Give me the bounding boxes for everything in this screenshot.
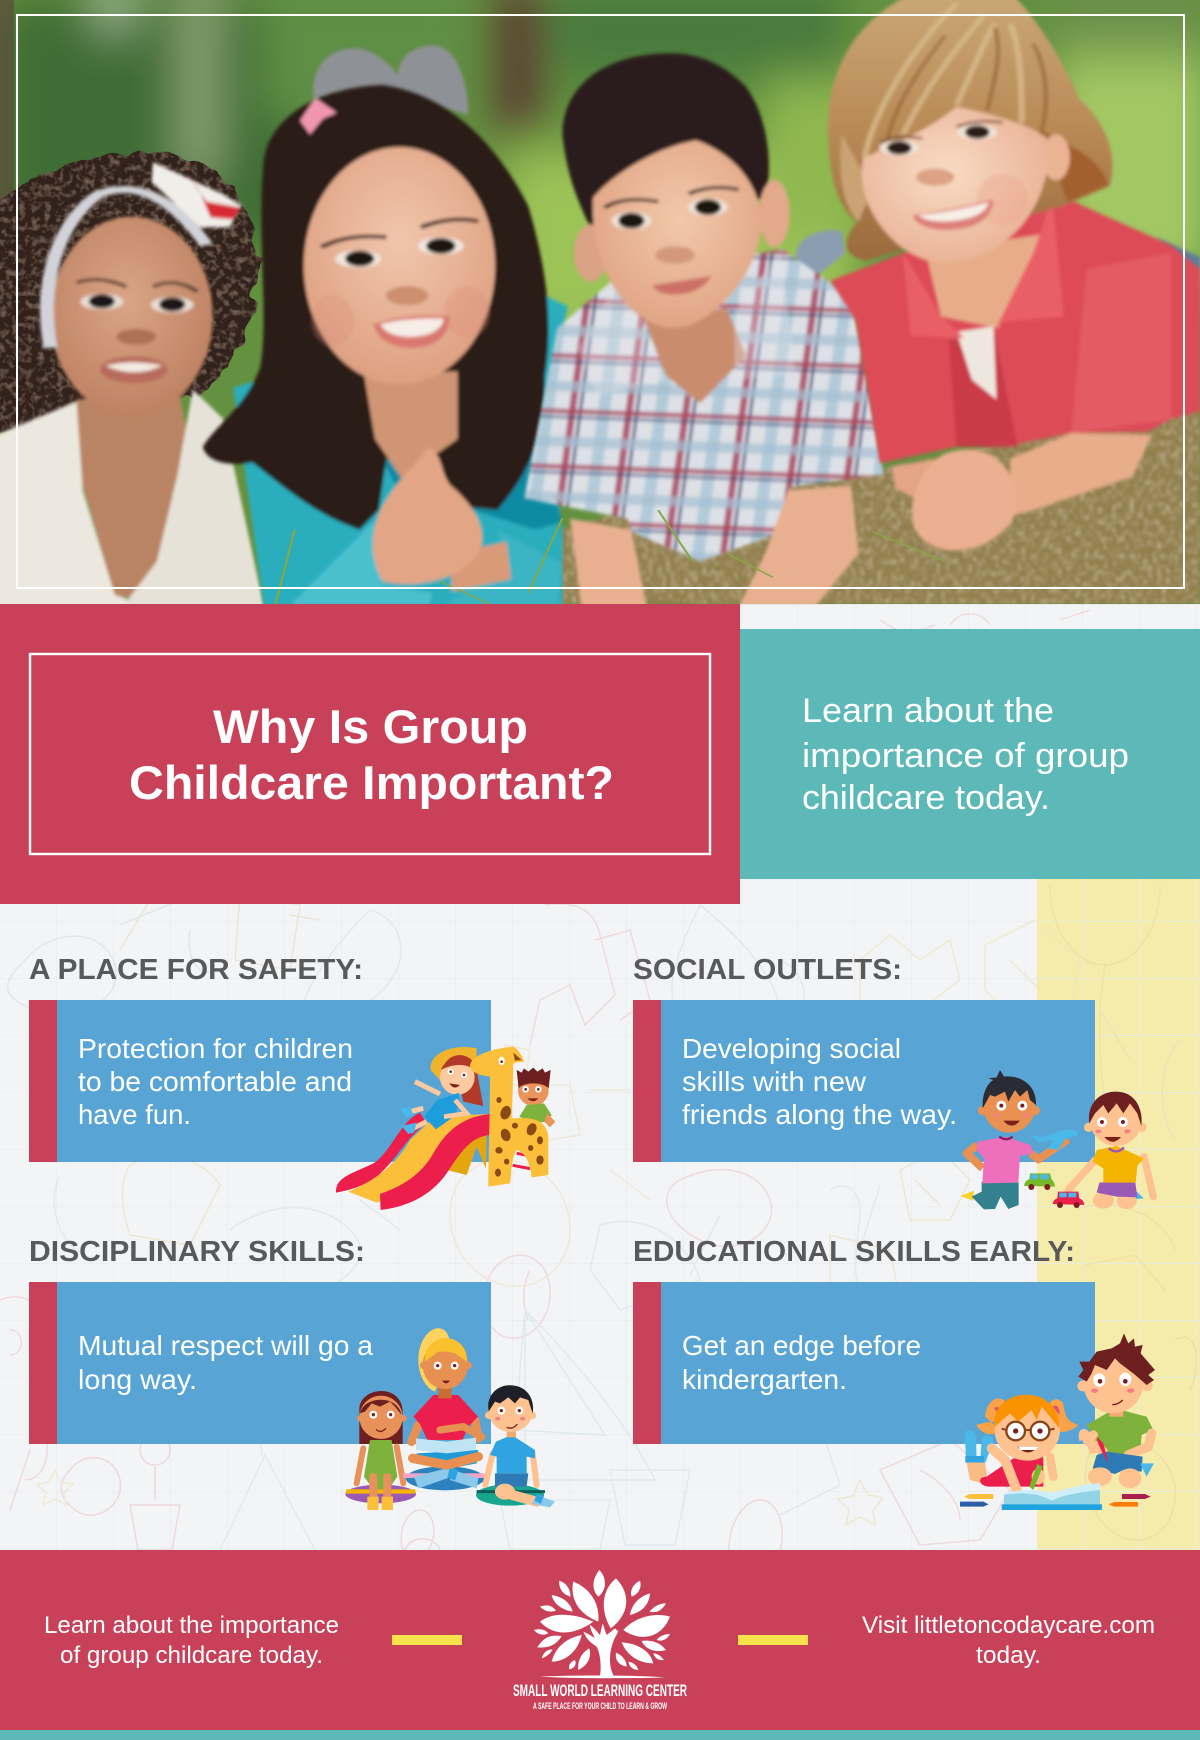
yellow dash right: [738, 1635, 808, 1645]
child 3: boy in plaid shirt: [524, 53, 884, 607]
card: disciplinary: Mutual respect will go a: [78, 1330, 373, 1361]
heading: educational skills early: EDUCATIONAL SKILLS EARLY:: [633, 1236, 1075, 1268]
card: social: skills with new: [682, 1066, 867, 1097]
card: disciplinary: [29, 1282, 491, 1444]
footer band: [0, 1550, 1200, 1730]
child 2: girl with long dark hair: [203, 85, 568, 607]
grass: [559, 407, 1200, 604]
footer left text: Learn about the importance: [44, 1612, 339, 1639]
child 1: girl with curly hair: [0, 152, 264, 607]
jeans behind blond boy: [796, 230, 1200, 281]
card: social: Developing social: [682, 1033, 901, 1064]
card: safety: have fun.: [78, 1099, 191, 1130]
logo name: SMALL WORLD LEARNING CENTER: [513, 1681, 687, 1700]
notebook grid: [0, 604, 1200, 1550]
heading: disciplinary skills: DISCIPLINARY SKILLS:: [29, 1236, 365, 1268]
illustration: children drawing with a book: [960, 1333, 1155, 1510]
card: safety: [29, 1000, 491, 1162]
photo white frame: [17, 15, 1184, 588]
logo tagline: A SAFE PLACE FOR YOUR CHILD TO LEARN & GROW: [533, 1701, 667, 1711]
grey shoes behind girl: [313, 45, 468, 115]
card: educational: kindergarten.: [682, 1364, 847, 1395]
blurred green park background: [0, 0, 1200, 604]
illustration: boys playing with toys: [960, 1070, 1153, 1209]
card: safety: to be comfortable and: [78, 1066, 352, 1097]
heading: social outlets: SOCIAL OUTLETS:: [633, 954, 902, 986]
logo: tree and hand: [534, 1570, 670, 1678]
footer left text: of group childcare today.: [60, 1642, 323, 1669]
teal intro panel: Learn about the: [802, 692, 1054, 730]
card: social: [633, 1000, 1095, 1162]
card: educational: [633, 1282, 1095, 1444]
illustration: teacher reading with children: [345, 1328, 555, 1510]
grass blades in the foreground: [276, 510, 945, 604]
yellow dash left: [392, 1635, 462, 1645]
card: disciplinary: long way.: [78, 1364, 197, 1395]
illustration: slide and giraffe: [336, 1047, 555, 1210]
background doodles: [0, 610, 1196, 1583]
footer teal strip: [0, 1730, 1200, 1740]
yellow background strip: [1037, 879, 1200, 1551]
footer right text: Visit littletoncodaycare.com: [862, 1612, 1155, 1639]
teal intro panel: [740, 629, 1200, 879]
footer left text: [44, 1612, 339, 1669]
card: social: friends along the way.: [682, 1099, 957, 1130]
title panel: [0, 604, 740, 904]
card: safety: Protection for children: [78, 1033, 353, 1064]
footer right text: [862, 1612, 1155, 1669]
child 4: blond boy in red polo: [828, 0, 1200, 550]
heading: a place for safety: A PLACE FOR SAFETY:: [29, 954, 363, 986]
teal intro panel: importance of group: [802, 737, 1129, 775]
curly hair: [0, 152, 257, 435]
card: educational: Get an edge before: [682, 1330, 921, 1361]
hero photo: four smiling children on grass: [0, 0, 1200, 607]
title panel: Childcare Important?: [129, 756, 614, 809]
teal intro panel: childcare today.: [802, 779, 1050, 817]
title panel: Why Is Group: [213, 700, 528, 753]
footer right text: today.: [976, 1642, 1041, 1669]
